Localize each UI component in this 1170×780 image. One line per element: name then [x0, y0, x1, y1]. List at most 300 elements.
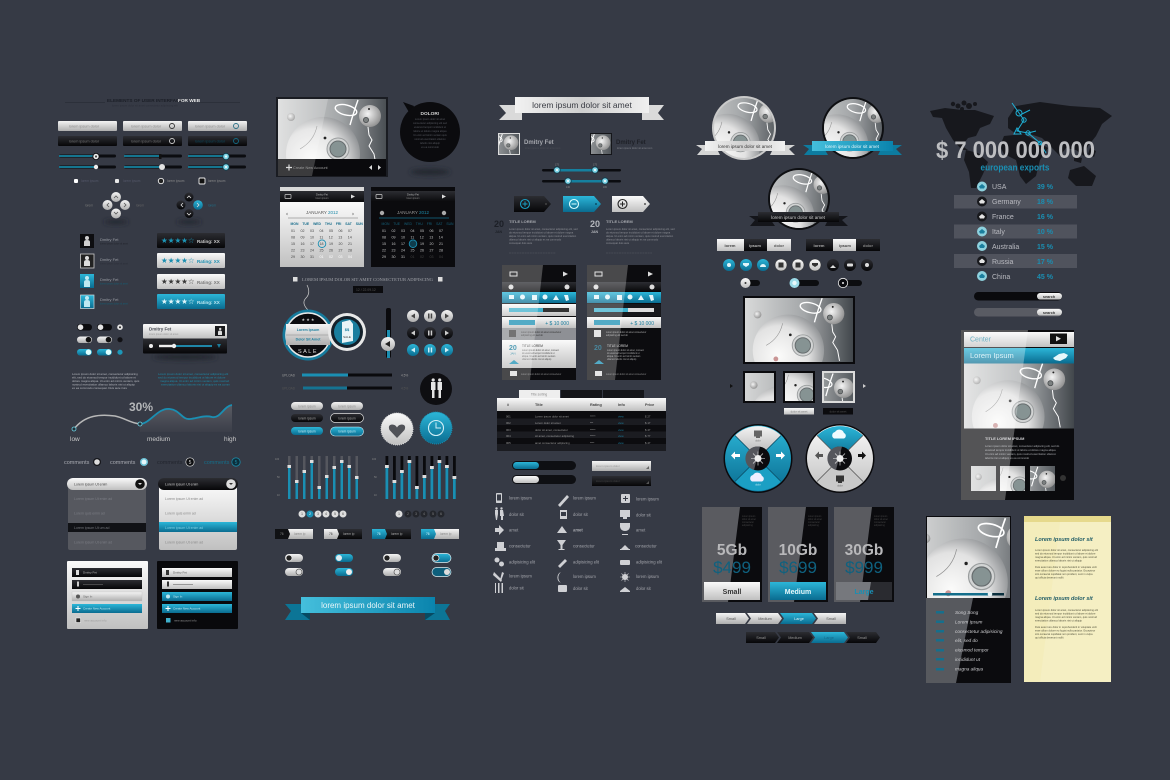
pricing card: 30Gb: $999: [845, 558, 883, 577]
data table: Rating: [590, 403, 602, 407]
pricing card: 5Gb: 5Gb: [717, 542, 747, 559]
equalizer: gray: 10: [277, 494, 280, 497]
mobile card: dark: adipisicing elit sed do: [606, 334, 629, 337]
comment counters: comments: [64, 460, 90, 466]
radio options: lorem ipsum: [208, 179, 226, 183]
speech bubble: eiusmod tempor incididunt ut: [414, 126, 446, 129]
speech bubble: Lorem ipsum dolor sit amet: [415, 118, 445, 121]
yellow note: magna aliqua. Ut enim ad minim veniam, quis nostrud: [1035, 615, 1097, 619]
article card: Center: [970, 336, 992, 344]
price tags: [275, 529, 459, 539]
column 2: media and calendars: [275, 97, 460, 620]
dropdown: light list: [158, 478, 238, 550]
segmented control: dark: [806, 239, 880, 251]
data table: amet consectetur adipiscing: [535, 441, 570, 445]
mobile card: dark: Lorem ipsum dolor sit amet, consect: [607, 349, 644, 352]
segmented control: dark: dolor: [863, 243, 873, 248]
dropdown: dark list: Lorem quis enim ad: [74, 512, 105, 516]
data table: sit amet, consectetur adipiscing: [535, 434, 574, 438]
calendar: light: [280, 187, 364, 267]
speech bubble: consectetur adipisicing elit sed: [413, 122, 448, 125]
data table: Price: [645, 403, 654, 407]
icon list: lorem ipsum: [573, 574, 596, 579]
yellow note: Duis aute irure dolor in reprehenderit in voluptate velit: [1035, 625, 1097, 629]
login panel: dark: [157, 561, 238, 629]
login panel: light: Sign In: [83, 594, 93, 598]
text blocks: [72, 372, 231, 390]
direction pads: lorem: [85, 204, 93, 208]
small toggles: [77, 324, 123, 356]
radial menu: blue: dolor: [755, 440, 761, 442]
profile cards: [450, 131, 653, 193]
user player card: [143, 324, 227, 360]
thumbnail strip: [730, 351, 866, 457]
teal ribbon: lorem ipsum dolor sit amet: [321, 601, 416, 610]
dropdown: light list: Lorem quis enim ad: [165, 512, 196, 516]
news item 1: JAN: [495, 230, 502, 234]
breadcrumb: dark: Small: [857, 636, 867, 640]
text blocks: magna aliqua. Ut enim ad minim veniam, quis nostrud: [160, 379, 229, 383]
login panel: dark: Dmitry Fet: [173, 570, 187, 574]
radio options: [74, 178, 226, 184]
comment counters: comments: [157, 460, 183, 466]
total exports heading: $ 7 000 000 000: [936, 137, 1095, 164]
calendar: dark: 01 02 03 04 05 06 07: [382, 229, 443, 233]
large image: [743, 296, 855, 386]
speech bubble: nostrud exercitation ullamco: [414, 138, 446, 141]
rating boxes: Rating: XX: [197, 300, 220, 305]
music player card: Lorem Ipsum: [955, 620, 982, 624]
upload progress bars: UPLOAD: [282, 374, 296, 378]
article card: Lorem ipsum dolor sit amet, consectetur adipiscing elit, sed do: [985, 444, 1060, 448]
pill buttons: lorem ipsum: [338, 430, 356, 434]
mobile card: dark: [587, 265, 661, 380]
pagination: 6: [342, 512, 344, 516]
export country table: Australia: [992, 244, 1019, 251]
music player card: consectetur adipisicing: [955, 629, 1003, 634]
caption with tooltip: 12 / 22.09.12: [356, 288, 376, 292]
news item 1: aliqua. Ut enim ad minim veniam, quis nostrud exercitation: [509, 234, 577, 238]
price tags: lorem ip: [440, 532, 452, 536]
mobile card: light: Lorem ipsum dolor sit amet, consect: [522, 349, 559, 352]
range sliders: 175: [593, 164, 598, 166]
profile cards: lorem ipsum dolor sit amet con: [525, 146, 561, 150]
price tags: lorem ip: [391, 532, 403, 536]
segmented control: light: ipsum: [749, 243, 761, 248]
pill buttons: [291, 402, 364, 436]
title: ELEMENTS OF USER INTERFACE: [107, 98, 183, 103]
comment counters: comments: [110, 460, 136, 466]
news item 2: ullamco laboris nisi ut aliquip ex ea commodo: [606, 238, 659, 242]
icon list: dolor sit: [636, 512, 651, 518]
rating boxes: Rating: XX: [197, 280, 220, 285]
export country table: 15 %: [1037, 244, 1054, 251]
upload progress bars: [282, 374, 408, 390]
yellow note: sed do eiusmod tempor incididunt ut labore et dolore: [1035, 612, 1096, 616]
export country table: 10 %: [1037, 229, 1054, 236]
radial menu: blue: dolor: [755, 484, 761, 486]
upload progress bars: 4.5%: [401, 386, 408, 390]
export country table: 45 %: [1037, 274, 1054, 281]
title: [65, 98, 240, 108]
text blocks: exercitation ullamco laboris nisi ut aliquip ex ea comm: [161, 382, 231, 386]
mobile card: light: JAN: [510, 352, 516, 356]
news item 2: Lorem ipsum dolor sit amet, consectetur adipisicing elit, sed: [606, 227, 675, 231]
mobile card: light: 20: [509, 345, 517, 352]
image slider panel: Create New Account: [293, 166, 329, 170]
yellow note: sint occaecat cupidatat non proident, sunt in culpa: [1035, 632, 1093, 636]
pricing card: 10Gb: adipisicing: [808, 525, 819, 527]
user list: Dmitry Fet: [100, 297, 119, 302]
mobile card: light: aliqua. Ut enim ad minim veniam: [522, 355, 555, 358]
calendar: light: JANUARY 2012: [306, 210, 339, 215]
breadcrumb: dark: Small: [756, 636, 766, 640]
rating boxes: ★★★★☆: [161, 277, 195, 286]
dropdown: dark list: Lorem ipsum Ut um ad: [74, 526, 109, 530]
icon list: consectetur: [635, 544, 657, 548]
radio options: lorem ipsum: [167, 179, 185, 183]
rating boxes: Rating: XX: [197, 239, 220, 244]
calendar: light: MON TUE WED THU FRI SAT SUN: [290, 222, 363, 226]
sale badge: SALE: [298, 349, 318, 355]
data table: *****: [590, 414, 596, 418]
music player card: elit, sed do: [955, 638, 978, 643]
text blocks: Lorem ipsum dolor sit amet, consectetur adipisicing: [72, 372, 138, 376]
speech bubble: [400, 102, 460, 175]
yellow note: esse cillum dolore eu fugiat nulla pariatur. Excepteur: [1035, 628, 1095, 632]
dropdown: light list: Lorem ipsum Ut enim ad: [165, 526, 203, 530]
calendar: dark: 08 09 10 11 12 13 14: [382, 236, 443, 240]
news item 2: consequat duis aute: [606, 241, 630, 245]
icon list: adipisicing elit: [573, 560, 600, 564]
data table: $ 17: [645, 421, 651, 425]
calendar: dark: lorem ipsum: [406, 197, 420, 200]
dropdown: dark list: [67, 478, 147, 550]
heart seal: [381, 413, 413, 445]
pagination: 3: [415, 512, 417, 516]
world map: [930, 100, 1112, 188]
input buttons: lorem ipsum dolor: [69, 140, 100, 144]
pricing card: 5Gb: adipisicing: [742, 525, 753, 527]
calendar: light: 08 09 10 11 12 13 14: [291, 236, 352, 240]
data table: view: [618, 414, 625, 418]
icon list: consectetur: [509, 544, 531, 548]
icon list: dolor sit: [573, 512, 588, 517]
news item 1: ullamco laboris nisi ut aliquip ex ea commodo: [509, 238, 562, 242]
sale badge: Dolor Sit Amet: [296, 338, 321, 342]
news item 1: do eiusmod tempor incididunt ut labore et dolore magna: [509, 230, 574, 234]
user player card: lorem ipsum dolor sit amet: [149, 333, 179, 336]
mobile card: dark: do eiusmod tempor incididunt ut: [607, 352, 640, 355]
caption with tooltip: [293, 277, 442, 293]
yellow note: qui officia deserunt mollit: [1035, 576, 1064, 580]
pricing card: 5Gb: [702, 507, 762, 602]
icon list: lorem ipsum: [573, 496, 596, 500]
segmented control: dark: lorem: [814, 243, 825, 248]
equalizer: black: 100: [372, 458, 377, 461]
text blocks: Lorem ipsum dolor sit amet, consectetur adipisicing elit: [158, 372, 228, 376]
people button: [420, 373, 452, 405]
yellow note: exercitation ullamco laboris nisi ut aliquip: [1035, 558, 1083, 562]
music player card: magna aliqua: [955, 666, 984, 672]
pricing card: 10Gb: [768, 507, 828, 602]
direction pads: lorem: [208, 204, 216, 208]
login panel: light: [67, 561, 148, 629]
calendar: light: Dmitry Fet: [316, 192, 328, 196]
pricing card: 10Gb: Medium: [785, 589, 811, 596]
export country table: Germany: [992, 199, 1021, 206]
pricing card: 5Gb: Lorem ipsum: [742, 515, 755, 518]
export country table: France: [992, 214, 1014, 221]
range sliders: 140: [566, 186, 571, 189]
area line chart: 30%: [129, 400, 153, 414]
range sliders: 175: [555, 164, 560, 166]
breadcrumb: light: Small: [726, 617, 736, 621]
speech bubble: Ut enim ad minim veniam quis: [413, 134, 447, 137]
yellow note: Lorem ipsum dolor sit amet, consectetur adipisicing elit: [1035, 608, 1098, 612]
equalizer: gray: 100: [275, 458, 280, 461]
data table: ****: [590, 441, 595, 445]
yellow note: Lorem ipsum dolor sit: [1035, 537, 1094, 543]
column 4: badges, sliders, wheels, pricing: [688, 96, 902, 643]
data table: ***: [590, 421, 594, 425]
news item 2: aliqua. Ut enim ad minim veniam, quis nostrud exercitation: [606, 234, 674, 238]
image badge with black ribbon: lorem ipsum dolor sit amet: [771, 215, 826, 220]
calendar: light: 22 23 24 25 26 27 28: [291, 248, 352, 252]
pill buttons: lorem ipsum: [298, 404, 316, 408]
user list: lorem ipsum dolor sit amet: [100, 242, 128, 246]
speech bubble: laboris nisi aliquip: [420, 142, 440, 145]
radial menu: blue: [724, 424, 792, 493]
image slider panel: [276, 97, 390, 191]
user list: Dmitry Fet: [100, 237, 119, 242]
calendar: dark: MON TUE WED THU FRI SAT SUN: [382, 222, 454, 226]
text blocks: nostrud exercitation ullamco laboris nisi ut aliquip: [72, 382, 135, 386]
range sliders: [542, 164, 621, 189]
segmented control: dark: ipsum: [839, 243, 851, 248]
radial menu: white: [806, 424, 874, 493]
data table: 003: [506, 428, 511, 432]
calendar: dark: [371, 187, 455, 267]
icon list: amet: [509, 528, 519, 532]
data table: view: [618, 434, 625, 438]
switches: [285, 554, 451, 576]
profile cards: Dmitry Fet: [524, 140, 554, 146]
sale badge: Lorem Ipsum: [297, 328, 319, 332]
input buttons: lorem ipsum dolor: [131, 124, 162, 128]
user list: lorem ipsum dolor sit amet: [100, 262, 128, 266]
speech bubble: labore et dolore magna aliqua: [413, 130, 447, 133]
mobile card: dark: Lorem ipsum dolor sit amet consectetur: [606, 373, 646, 376]
pricing card: 5Gb: $499: [713, 558, 751, 577]
article card: Lorem Ipsum: [970, 351, 1014, 360]
data table: view: [618, 421, 625, 425]
search fields: search: [1043, 311, 1056, 315]
radio options: lorem ipsum: [81, 179, 99, 183]
data table: 001: [506, 414, 511, 418]
icon list: dolor sit: [509, 586, 524, 590]
mobile card: light: adipisicing elit sed do: [521, 334, 544, 337]
teal ribbon: [285, 597, 450, 620]
data table: 002: [506, 421, 511, 425]
pagination: 5: [334, 512, 336, 516]
news item 2: JAN: [591, 230, 598, 234]
caption with tooltip: LOREM IPSUM DOLOR SIT AMET CONSECTETUR ADIPISCING: [302, 277, 433, 282]
comment counters: 5: [189, 460, 192, 466]
data table: $ 47: [645, 441, 651, 445]
user list: Dmitry Fet: [100, 277, 119, 282]
pricing card: 10Gb: $699: [779, 558, 817, 577]
mobile card: dark: TITLE LOREM: [607, 344, 628, 348]
input buttons: lorem ipsum dolor: [131, 140, 162, 144]
title: lorem ipsum dolor sit amet consectetur adipiscing elit: [112, 104, 178, 108]
column 5: map, exports, cards: [910, 100, 1112, 683]
range sliders: 180: [603, 186, 608, 189]
input buttons: lorem ipsum dolor: [195, 140, 226, 144]
pagination: 5: [432, 512, 434, 516]
sale badge: ★ ★ ★: [302, 317, 315, 322]
yellow note: magna aliqua. Ut enim ad minim veniam, quis nostrud: [1035, 555, 1097, 559]
input buttons: [58, 121, 247, 146]
article card: laboris nisi ut aliquip ex ea commodo: [985, 456, 1030, 460]
text blocks: sed do eiusmod tempor incididunt ut labore et dolore: [158, 376, 226, 380]
title: FOR WEB: [178, 98, 201, 103]
input buttons: lorem ipsum dolor: [195, 124, 226, 128]
pricing card: 30Gb: 30Gb: [845, 542, 883, 559]
breadcrumb: light: Medium: [758, 617, 772, 621]
mobile card: dark: + $ 10 000: [630, 321, 654, 327]
yellow note: Lorem ipsum dolor sit: [1035, 596, 1094, 602]
speech bubble: DOLOR!: [421, 111, 440, 117]
mobile card: light: [502, 265, 576, 380]
rating boxes: [157, 233, 225, 309]
music player card: Song Song: [955, 610, 979, 615]
dropdown: dark list: Lorem ipsum Ut enim ad: [74, 497, 112, 501]
search fields: [974, 292, 1062, 316]
total exports heading: european exports: [980, 162, 1050, 172]
news item 1: Lorem ipsum dolor sit amet, consectetur adipisicing elit, sed: [509, 227, 578, 231]
segmented control: light: [717, 239, 791, 251]
breadcrumb: dark: Medium: [788, 636, 802, 640]
calendar: light: lorem ipsum: [315, 197, 329, 200]
comment counters: 5: [235, 460, 238, 466]
profile cards: Dmitry Fet: [616, 140, 646, 146]
yellow note: exercitation ullamco laboris nisi ut aliquip: [1035, 618, 1083, 622]
pricing card: 5Gb: Small: [723, 589, 741, 596]
area line chart: low: [70, 436, 80, 443]
radial menu: white: dolor: [837, 484, 843, 488]
data table: 004: [506, 434, 511, 438]
mobile card: light: Lorem ipsum dolor sit amet consectetur: [521, 373, 561, 376]
pagination: 2: [309, 512, 311, 516]
volume slider: [381, 308, 395, 358]
pricing card: 10Gb: dolor sit amet: [808, 518, 822, 521]
news item 2: [590, 219, 675, 253]
icon list: lorem ipsum: [636, 574, 659, 579]
rating boxes: ★★★★☆: [161, 236, 195, 245]
news item 1: TITLE LOREM: [509, 219, 536, 224]
sale sticker: [328, 313, 366, 351]
price tags: 76: [377, 532, 381, 536]
music player card: incididunt ut: [955, 657, 981, 662]
breadcrumb: light: Small: [826, 617, 836, 621]
icon list: consectetur: [573, 544, 595, 548]
pagination: 6: [440, 512, 442, 516]
sale badge: [282, 285, 334, 360]
icon list: dolor sit: [509, 512, 524, 517]
price tags: 76: [329, 532, 333, 536]
calendar: dark: 22 23 24 25 26 27 28: [382, 248, 443, 252]
radio options: lorem ipsum: [123, 179, 141, 183]
icon list: amet: [636, 528, 646, 532]
news item 1: consequat duis aute: [509, 241, 533, 245]
export country table: 18 %: [1037, 199, 1054, 206]
icon list: lorem ipsum: [509, 496, 532, 500]
thumbnail strip: dolor sit amet: [830, 410, 847, 414]
comment counters: [64, 458, 240, 466]
price tags: lorem ip: [294, 532, 306, 536]
media buttons: [407, 310, 453, 356]
pricing card: 10Gb: consectetur: [808, 521, 820, 524]
pagination: 1: [398, 512, 400, 516]
article card: [961, 330, 1074, 538]
yellow note: Duis aute irure dolor in reprehenderit in voluptate velit: [1035, 565, 1097, 569]
direction pads: lorem: [136, 204, 144, 208]
export country table: 17 %: [1037, 259, 1054, 266]
data table: view: [618, 428, 625, 432]
user list: lorem ipsum dolor sit amet: [100, 302, 128, 306]
equalizer: gray: [275, 456, 358, 499]
tag buttons: [514, 196, 650, 212]
pricing card: 5Gb: consectetur: [742, 521, 754, 524]
dropdown: dark list: Lorem ipsum Ut enim ad: [74, 540, 112, 544]
data table: $ 77: [645, 434, 651, 438]
export country table: China: [992, 274, 1010, 281]
mobile card: light: Lorem ipsum dolor sit amet consectetur: [521, 331, 561, 334]
text inputs: lorem ipsum dolor: [596, 464, 620, 468]
pricing card: 30Gb: consectetur: [874, 521, 886, 524]
price tags: lorem ip: [343, 532, 355, 536]
data table: Title: [535, 403, 543, 407]
pill buttons: lorem ipsum: [298, 429, 316, 433]
pricing card: 30Gb: [834, 507, 894, 602]
breadcrumb: light: Large: [794, 617, 804, 621]
music player card: [910, 516, 1044, 683]
thumbnail strip: dolor sit amet: [791, 410, 808, 414]
segmented control: light: lorem: [725, 243, 736, 248]
mobile card: light: + $ 10 000: [545, 321, 569, 327]
mobile card: dark: ullamco laboris nisi ut aliquip: [607, 358, 637, 361]
mobile card: dark: 20: [594, 345, 602, 352]
text blocks: dolore magna aliqua. Ut enim ad minim veniam, quis: [72, 379, 140, 383]
pricing card: 30Gb: dolor sit amet: [874, 518, 888, 521]
price tags: 76: [280, 532, 284, 536]
pagination: 1: [301, 512, 303, 516]
yellow note: sed do eiusmod tempor incididunt ut labore et dolore: [1035, 552, 1096, 556]
export country table: USA: [992, 184, 1007, 191]
pill buttons: lorem ipsum: [338, 404, 356, 408]
column 1: controls: [58, 98, 247, 629]
icon list: [493, 493, 663, 593]
calendar: light: 01 02 03 04 05 06 07: [291, 229, 352, 233]
pricing card: 30Gb: adipisicing: [874, 525, 885, 527]
equalizer: black: 50: [374, 476, 377, 479]
article card: eiusmod tempor incididunt ut labore et dolore magna aliqua: [985, 448, 1056, 452]
data table: [497, 390, 666, 451]
image badge with blue ribbon: lorem ipsum dolor sit amet: [825, 144, 880, 149]
calendar: dark: 15 16 17 18 19 20 21: [382, 242, 443, 246]
equalizer: black: 10: [374, 494, 377, 497]
